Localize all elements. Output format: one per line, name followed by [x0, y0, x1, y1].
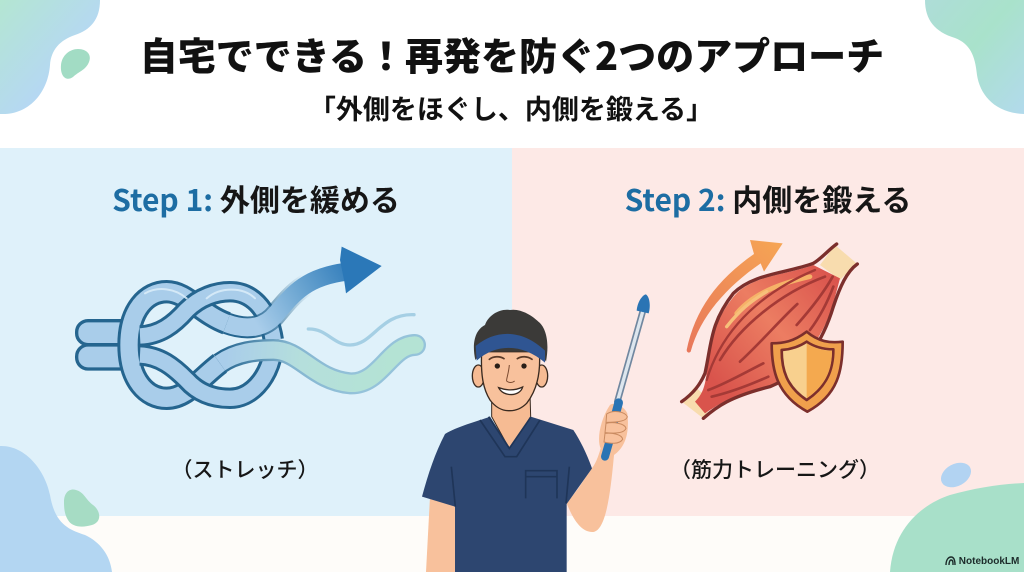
scrub shirt [422, 417, 592, 572]
logo: NotebookLM: NotebookLM [959, 556, 1019, 567]
label: stretch: （ストレッチ） [172, 454, 318, 484]
right arm and hand [567, 404, 628, 532]
panel: step 1 background [0, 148, 512, 516]
subtitle: 「外側をほぐし、内側を鍛える」 [309, 88, 713, 127]
label: strength training: （筋力トレーニング） [670, 454, 880, 484]
bottom strip [0, 516, 1024, 572]
collar and pocket lines [451, 417, 569, 507]
character: therapist with pointer [422, 294, 650, 572]
pointer [605, 294, 650, 457]
title: 自宅でできる！再発を防ぐ2つのアプローチ [140, 26, 884, 81]
neck [492, 393, 531, 450]
fingers [604, 411, 627, 443]
left arm [426, 497, 455, 572]
icon: muscle with shield [680, 240, 860, 420]
panel: step 2 background [512, 148, 1024, 516]
icon: knot loosening with arrow [75, 246, 426, 410]
heading: step 1: Step 1: 外側を緩める [112, 176, 400, 220]
head [472, 310, 548, 411]
heading: step 2: Step 2: 内側を鍛える [625, 176, 911, 220]
